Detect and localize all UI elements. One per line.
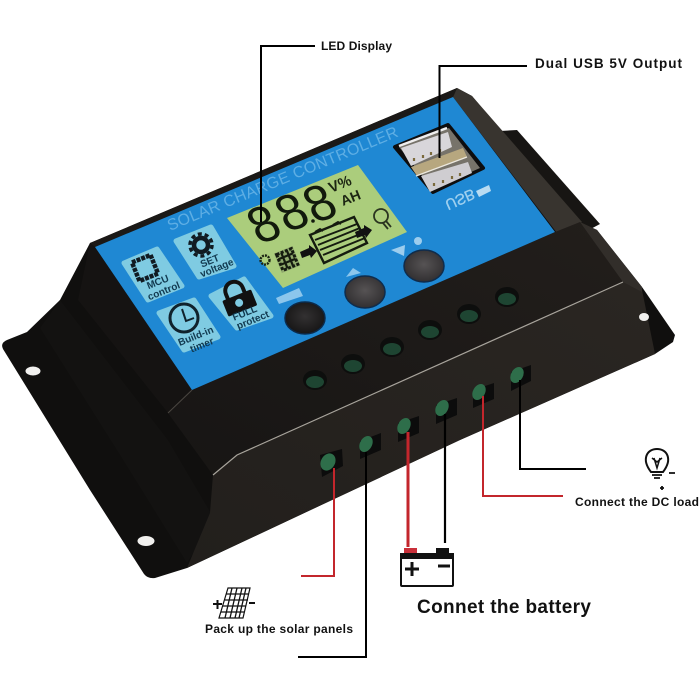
right side rail [453,88,582,233]
tile: SET voltage: voltage [199,257,236,280]
front right chamfer [580,222,642,292]
callout label: USB: Dual USB 5V Output [535,56,682,71]
mounting hole bottom [138,536,154,546]
LCD display [227,165,407,288]
blue front panel [95,97,555,390]
LCD digits: 8 [237,193,290,255]
tile: FULL protect: protect [235,309,271,332]
label: DC load: Connect the DC load [575,495,699,509]
icon: battery [400,548,454,586]
wire: battery positive [406,432,410,547]
button: menu [285,302,325,334]
panel heading: SOLAR CHARGE CONTROLLER [165,124,401,235]
USB label: USB [442,185,477,213]
wire: load positive [483,396,563,496]
decimal point [311,219,315,223]
icon: clock [170,304,198,332]
icon: solar panel [213,588,255,618]
button glyph: menu [276,288,303,304]
wire: battery negative [444,414,446,543]
label: solar panels: Pack up the solar panels [205,622,353,636]
contact pins [414,149,460,186]
ridge highlight [213,282,623,475]
wire: solar negative [298,452,366,657]
LCD units: AH [338,186,363,209]
lower front face [187,282,655,568]
tile: FULL protect [211,276,271,332]
callout label: LED display: LED Display [321,39,392,53]
tile: SET voltage: SET [199,253,221,270]
USB port [395,125,483,192]
top socket rim [399,128,447,146]
LED indicators [303,287,519,390]
arrow to load [355,225,372,238]
mounting hole left [26,366,40,376]
wire: solar positive [301,468,334,576]
rear flange [500,130,600,232]
ridge line [168,390,192,413]
button glyph: bulb [414,237,422,245]
icon: light bulb [646,449,675,490]
terminal slots [317,365,531,477]
tile: FULL protect: FULL [231,304,259,324]
tile: MCU control: control [146,280,182,303]
top socket [401,132,452,166]
icon: LCD battery [310,217,367,263]
LCD digits: 8 [265,181,318,243]
wire: load negative [520,380,586,469]
icon: LCD bulb [374,209,391,229]
LCD digits [237,172,346,255]
upper front face [168,222,623,475]
icon: solar grid [274,246,300,273]
tile: Build-in timer: Build-in [177,325,215,349]
label: battery: Connet the battery [417,597,591,618]
tile: SET voltage [176,227,236,280]
callout line: LED display [261,46,315,222]
left flange highlight [40,300,215,563]
LCD units [326,172,363,209]
controller body [2,88,675,578]
button glyph: up [346,268,361,277]
icon: padlock [217,276,257,317]
mounting hole right [639,313,649,321]
tile: Build-in timer [159,300,218,355]
button: down [404,250,444,282]
tile: Build-in timer: timer [189,336,216,355]
metal frame [399,128,480,189]
LCD units: V% [326,172,354,197]
arrow to battery [300,245,317,258]
tile: MCU control: MCU [145,273,171,292]
button glyph: down [391,245,405,256]
top rim [90,88,457,247]
left side rail [78,243,192,413]
icon: gear [190,234,212,256]
icon: chip [132,255,158,281]
buttons [276,237,444,334]
tile: MCU control [124,249,182,303]
button: up [345,276,385,308]
LCD digits: 8 [293,172,346,234]
callout line: USB [440,66,527,158]
icon: sun [260,256,270,264]
base and mounting flanges [2,88,675,578]
bar highlight [416,157,467,176]
centre connector block [411,148,467,176]
bottom socket [421,162,472,192]
USB symbol [476,185,491,197]
